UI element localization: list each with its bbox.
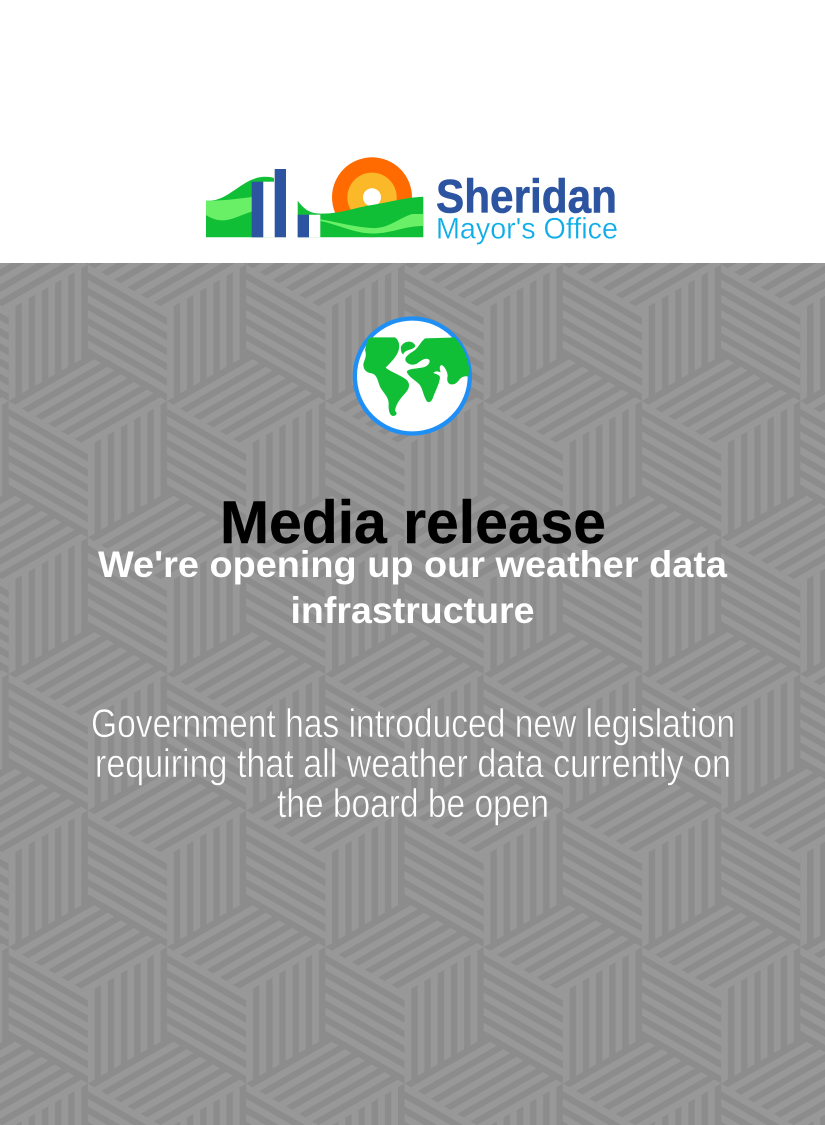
logo tagline: Mayor's Office: Mayor's Office — [436, 212, 618, 245]
panel: patterned background — [0, 263, 825, 1125]
text block: legislation summary: requiring that all weather data currently on — [95, 742, 731, 786]
logo: Sheridan Mayor's Office — [206, 157, 618, 245]
icon: globe — [355, 318, 472, 433]
subtitle: weather data infrastructure — [98, 544, 727, 631]
logo wordmark: Sheridan: Sheridan — [436, 170, 617, 222]
text block: legislation summary — [91, 702, 735, 826]
icon: skyline and sunrise emblem — [206, 157, 423, 237]
subtitle: weather data infrastructure: infrastructure — [290, 590, 534, 631]
title: Media release: Media release — [220, 489, 606, 556]
text block: legislation summary: the board be open — [277, 782, 549, 826]
subtitle: weather data infrastructure: We're opening up our weather data — [98, 544, 727, 585]
